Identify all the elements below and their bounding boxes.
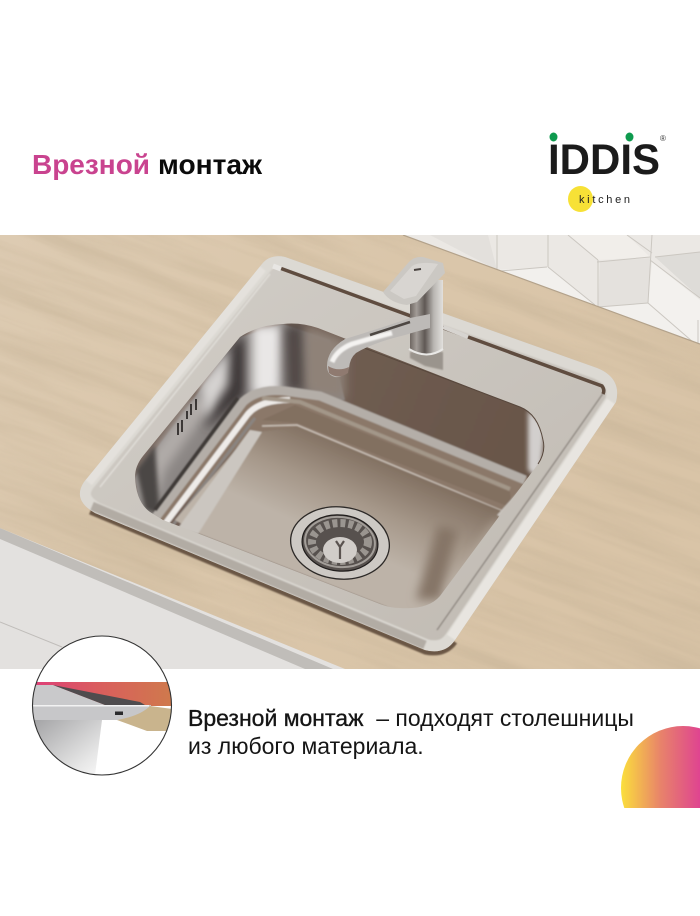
inset chipboard section [117,706,172,731]
description line 1: Врезной монтаж – подходят столешницы [188,705,634,731]
inset dark wedge [53,685,145,705]
faucet lever [383,257,445,305]
logo kitchen label: kitchen [579,194,630,206]
photo: sink in countertop [0,235,700,669]
ledge bright band [156,390,525,517]
cabinet front [0,520,360,669]
inset countertop edge [33,682,173,706]
basin floor [175,427,507,610]
decorative gradient circle [621,726,700,808]
logo: IDDIS kitchen [548,132,666,212]
drain [290,506,390,580]
faucet reflection on deck [410,352,443,370]
basin lower wall [155,389,528,523]
basin outline [343,340,544,464]
wall tiles [400,235,700,350]
logo yellow spot [568,186,593,212]
title: Врезной [32,149,150,180]
wooden countertop [0,235,700,669]
overflow vents [178,399,196,435]
title: монтаж [158,149,263,180]
logo wordmark: IDDIS [548,136,660,184]
faucet [327,257,445,377]
description line 2: из любого материала. [188,733,424,759]
sink drop shadow [90,512,455,653]
inset silver sink edge [33,685,105,705]
sink basin [135,324,544,608]
rim outer highlight [80,256,617,651]
sink rim [80,256,617,651]
registered mark: ® [660,134,666,143]
sink [80,256,617,653]
inset clip slot [115,712,123,715]
logo green dots [550,132,634,142]
inset steel rim [33,705,151,720]
faucet spout [327,314,430,377]
inset: cut-out countertop detail [32,636,173,775]
inset steel below [33,720,102,775]
description text [188,705,634,759]
title [32,149,263,180]
basin left wall [135,324,345,518]
overflow slot [277,267,604,394]
faucet body [410,280,443,355]
